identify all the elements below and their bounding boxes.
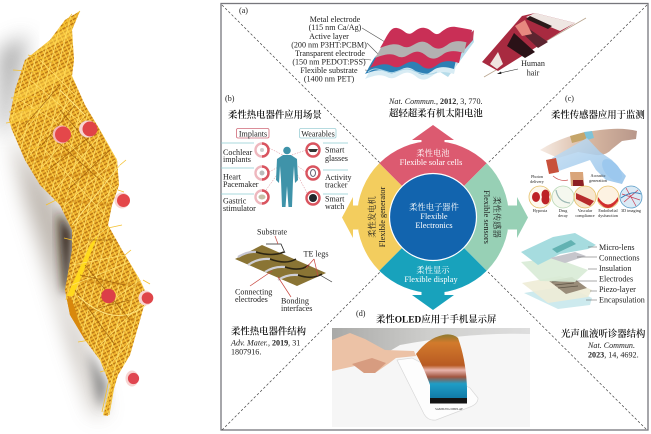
- implant labels: Gastric: [223, 196, 247, 206]
- implant labels: Cochlear: [223, 148, 253, 157]
- red leader lines: [250, 236, 318, 297]
- implant icons: [256, 144, 268, 204]
- centre circle: [390, 174, 476, 260]
- wearable labels: Smart: [325, 194, 345, 204]
- citation c: 2023, 14, 4692.: [588, 350, 639, 360]
- circle captions: dysfunction: [598, 213, 619, 218]
- structure labels: Connecting: [235, 288, 272, 296]
- wearables tag: Wearables: [301, 129, 335, 138]
- panel a heading: 超轻超柔有机太阳电池: [389, 108, 483, 120]
- citation b: [230, 338, 300, 356]
- citation a: Nat. Commun., 2012, 3, 770.: [388, 97, 483, 106]
- panel b heading: 柔性热电器件应用场景: [228, 109, 322, 121]
- panel c heading: 柔性传感器应用于监测: [551, 109, 645, 121]
- structure labels: [235, 228, 328, 313]
- centre circle: Flexible: [420, 212, 448, 221]
- panel letter a: (a): [239, 6, 248, 15]
- citation c: [587, 341, 639, 360]
- wearable labels: glasses: [325, 154, 348, 163]
- sector: display: [379, 247, 487, 310]
- sector: solar cells: Flexible solar cells: [400, 158, 462, 167]
- human hair label: [497, 59, 545, 78]
- implants tag: Implants: [239, 129, 267, 138]
- sector: sensors: Flexible sensors: [482, 190, 491, 244]
- small annotations: Photon: [531, 174, 544, 179]
- sector: solar cells: 柔性电池: [416, 148, 450, 158]
- ultrathin cell on human hair: [482, 13, 586, 77]
- row separators: [221, 143, 348, 194]
- circle captions: Drug: [559, 208, 568, 213]
- figure frame: [221, 4, 648, 430]
- layer labels: (1400 nm PET): [304, 74, 354, 84]
- structure labels: Bonding: [281, 296, 309, 306]
- circle captions: Endothelial: [598, 208, 618, 213]
- layer labels: [291, 15, 367, 84]
- structure heading: 柔性热电器件结构: [231, 326, 307, 338]
- implant labels: Heart: [223, 172, 242, 182]
- centre circle: 柔性电子器件: [409, 202, 460, 212]
- layer labels: Active layer: [309, 32, 349, 41]
- wrist with blue sensor beam: [540, 129, 637, 186]
- small annotations: [530, 173, 608, 184]
- layer labels: [599, 243, 645, 304]
- panel d heading: 柔性OLED应用于手机显示屏: [376, 314, 497, 326]
- ribbon cast shadow: [0, 35, 108, 416]
- sector: generator: [342, 163, 403, 271]
- wavy layered solar cell: [365, 27, 474, 80]
- connectors to body: [266, 148, 307, 193]
- panel b: thermoelectric scenarios: [221, 94, 352, 213]
- panel a: solar cells: [239, 6, 586, 120]
- wearable labels: watch: [325, 202, 344, 211]
- photo: bending OLED phone: SAMSUNG DISPLAY: [435, 407, 464, 411]
- thermoelectric device structure: [230, 228, 332, 356]
- citation b: 1807916.: [231, 348, 261, 356]
- stethoscope heading: 光声血液听诊器结构: [561, 328, 646, 340]
- circle captions: [533, 208, 642, 218]
- human body silhouette: [276, 147, 298, 207]
- implant labels: implants: [223, 155, 251, 164]
- sector: sensors: [463, 163, 528, 271]
- sector: sensors: 柔性传感器: [492, 196, 502, 238]
- layer leaders: [576, 247, 597, 300]
- sector: generator: Flexible generator: [378, 186, 387, 247]
- circle captions: Hypoxia: [533, 208, 547, 213]
- circle captions: decay: [558, 213, 569, 218]
- structure labels: electrodes: [235, 295, 268, 304]
- layer labels: Transparent electrode: [295, 49, 365, 58]
- wearable labels: tracker: [325, 180, 348, 190]
- circle captions: Vascular: [578, 208, 593, 213]
- panel letter b: (b): [225, 94, 235, 103]
- structure labels: Substrate: [257, 228, 287, 236]
- small annotations: Acoustic: [591, 173, 606, 178]
- central flexible electronics diagram: [342, 125, 528, 310]
- panel letter d: (d): [356, 309, 366, 318]
- sector: display: 柔性显示: [416, 265, 450, 275]
- layer labels: (150 nm PEDOT:PSS): [292, 58, 366, 66]
- panel c: sensors: [529, 94, 645, 218]
- layer labels: Insulation: [599, 264, 631, 273]
- small annotations: generation: [589, 178, 608, 183]
- layer labels: Piezo-layer: [599, 285, 636, 294]
- small annotations: delivery: [530, 179, 545, 184]
- structure labels: TE legs: [304, 250, 328, 258]
- citation b: Adv. Mater., 2019, 31: [230, 338, 300, 348]
- layer labels: Metal electrode: [310, 15, 361, 24]
- sector: generator: 柔性发电机: [367, 196, 377, 238]
- layer labels: Encapsulation: [599, 296, 645, 304]
- wearable icons: [306, 144, 320, 204]
- acoustic stethoscope structure: [521, 233, 646, 360]
- layer labels: Flexible substrate: [300, 66, 358, 75]
- circle captions: 3D imaging: [621, 208, 642, 213]
- implant labels: [223, 148, 259, 213]
- structure labels: interfaces: [281, 304, 312, 313]
- implant labels: stimulator: [223, 204, 256, 213]
- human hair label: hair: [527, 68, 540, 78]
- wearable labels: Activity: [325, 173, 352, 182]
- olive substrate with TE legs: [235, 244, 332, 286]
- wearable labels: Smart: [325, 146, 345, 154]
- photo: bending OLED phone: [332, 328, 530, 427]
- sector: display: Flexible display: [404, 275, 458, 284]
- layer labels: (200 nm P3HT:PCBM): [291, 40, 367, 50]
- panel d: OLED display: [332, 309, 530, 427]
- sector: solar cells: [379, 125, 487, 187]
- label leaders: [362, 28, 385, 71]
- five imaging circles: [529, 186, 642, 208]
- wearable labels: [325, 146, 352, 211]
- dashed diagonals: [222, 5, 647, 430]
- human hair label: Human: [521, 59, 545, 68]
- centre circle: Electronics: [415, 221, 453, 230]
- layer labels: Electrodes: [599, 274, 633, 284]
- red beads: [53, 120, 153, 386]
- implant labels: Pacemaker: [223, 180, 259, 189]
- circle captions: compliance: [575, 213, 595, 218]
- panel letter c: (c): [565, 94, 574, 103]
- citation c: Nat. Commun.: [587, 341, 635, 350]
- layer labels: Connections: [599, 254, 639, 262]
- layer labels: Micro-lens: [599, 243, 635, 252]
- photo: 3D woven flexible ribbon: [0, 0, 160, 430]
- exploded layer stack: [521, 233, 596, 309]
- woven yellow ribbon: [6, 10, 150, 416]
- layer labels: (115 nm Ca/Ag): [309, 23, 362, 32]
